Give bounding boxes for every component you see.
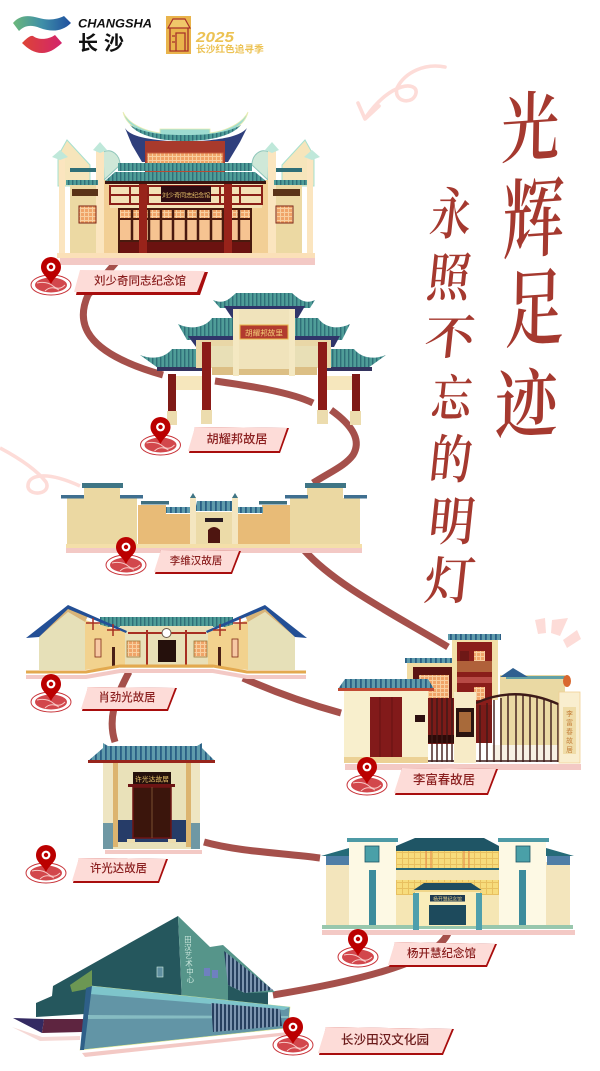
building: 肖劲光故居 [26,605,307,677]
subtitle calligraphy: 明 [426,493,478,552]
building: 李富春故居: 富 [566,718,573,727]
location pin 6 [347,757,387,795]
label: 李维汉故居 [154,550,241,574]
logo: Changsha: 长沙 [78,32,130,55]
logo: Changsha: CHANGSHA [78,16,152,30]
label: 李富春故居: 李富春故居 [413,772,475,787]
building: 刘少奇同志纪念馆: 刘少奇同志纪念馆 [162,192,210,200]
location pin 3 [106,537,146,575]
subtitle calligraphy: 永 [427,184,475,247]
subtitle calligraphy: 照 [424,250,475,308]
subtitle calligraphy: 灯 [421,554,478,611]
decorative curl left [0,448,80,493]
decorative curl with arrow [358,66,445,119]
building: 杨开慧纪念馆: 杨开慧纪念馆 [433,896,462,902]
building: 杨开慧纪念馆 [321,838,575,935]
location pin 1 [31,257,71,295]
building: 许光达故居: 许光达故居 [135,774,169,784]
label: 肖劲光故居: 肖劲光故居 [99,690,155,704]
building: 田汉艺术中心: 术 [185,959,193,968]
label: 杨开慧纪念馆: 杨开慧纪念馆 [407,946,476,960]
location pin 2 [140,417,180,455]
label: 刘少奇同志纪念馆 [74,270,208,295]
location pin 7 [338,929,378,967]
building: 田汉艺术中心: 艺 [185,951,192,960]
building: 李富春故居: 居 [566,746,573,754]
building: 许光达故居 [88,743,215,854]
logo: 2025 red season seal: 2025 [195,29,235,46]
location pin 4 [31,674,71,712]
building: 李富春故居: 李 [566,709,573,718]
building: 李富春故居: 故 [566,736,573,745]
building: 李维汉故居 [61,483,367,553]
location pin 5 [26,845,66,883]
building: 田汉艺术中心: 田 [184,935,192,944]
main title calligraphy: 辉 [502,172,565,272]
label: 许光达故居 [72,858,168,883]
building: 李富春故居: 春 [566,727,573,736]
building: 田汉艺术中心: 心 [187,975,195,984]
label: 长沙田汉文化园: 长沙田汉文化园 [341,1032,429,1047]
logo: 2025 red season seal [166,16,264,56]
building: 胡耀邦故居: 胡耀邦故里 [245,328,283,338]
route line [83,260,449,995]
subtitle calligraphy: 不 [422,311,479,365]
logo: Changsha [13,16,152,55]
building: 李富春故居 [338,634,581,770]
label: 肖劲光故居 [81,687,177,711]
label: 李维汉故居: 李维汉故居 [170,554,222,567]
subtitle calligraphy: 的 [427,432,475,490]
main title calligraphy: 迹 [494,362,562,449]
building: 胡耀邦故居 [140,293,386,425]
logo: 2025 red season seal: 长沙红色追寻季 [196,42,264,56]
subtitle calligraphy [421,184,479,611]
label: 刘少奇同志纪念馆: 刘少奇同志纪念馆 [94,274,186,288]
building: 田汉艺术中心: 汉 [184,943,192,952]
label: 李富春故居 [394,768,498,795]
label: 胡耀邦故居: 胡耀邦故居 [207,431,267,446]
label: 许光达故居: 许光达故居 [90,861,147,875]
location pin 8 [273,1017,313,1055]
main title calligraphy: 足 [504,261,565,360]
subtitle calligraphy: 忘 [429,372,477,427]
main title calligraphy [494,86,565,449]
label: 杨开慧纪念馆 [388,942,497,967]
main title calligraphy: 光 [501,86,560,174]
label: 胡耀邦故居 [188,427,289,453]
building: 田汉艺术中心 [12,916,290,1057]
decorative sparks [535,618,581,648]
label: 长沙田汉文化园 [318,1027,454,1055]
building: 刘少奇同志纪念馆 [52,112,320,265]
building: 田汉艺术中心: 中 [186,967,194,976]
